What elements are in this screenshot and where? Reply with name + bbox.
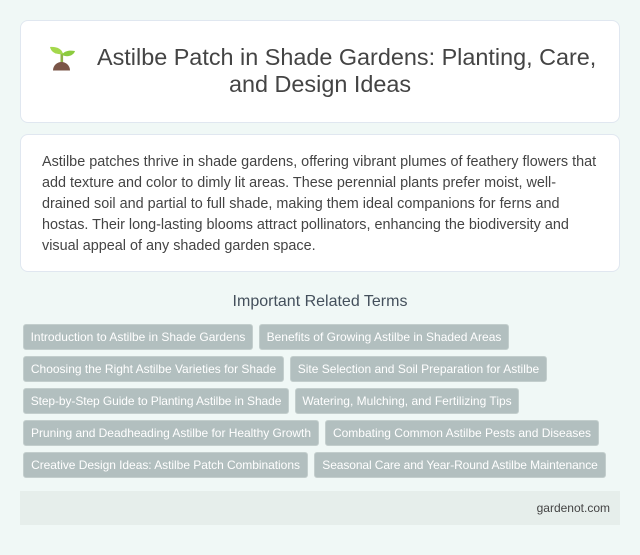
- tag: [23, 356, 284, 382]
- summary text: drained soil and partial to full shade, making them ideal companions for ferns and: [42, 196, 560, 212]
- tag: Choosing the Right Astilbe Varieties for Shade: [31, 362, 276, 376]
- tag: Watering, Mulching, and Fertilizing Tips: [302, 394, 512, 408]
- tag: [295, 388, 519, 414]
- panel: title card: and Design Ideas: [229, 71, 411, 97]
- tag: Site Selection and Soil Preparation for Astilbe: [298, 362, 539, 376]
- tag: Pruning and Deadheading Astilbe for Healthy Growth: [31, 426, 311, 440]
- tag: [259, 324, 509, 350]
- title: [97, 44, 596, 97]
- tag: Creative Design Ideas: Astilbe Patch Combinations: [31, 458, 300, 472]
- heading: related terms: Important Related Terms: [233, 293, 407, 310]
- panel: title card: Astilbe Patch in Shade Gardens: Planting, Care,: [97, 44, 596, 70]
- tag: Step-by-Step Guide to Planting Astilbe in Shade: [31, 394, 281, 408]
- summary text: hostas. Their long-lasting blooms attract pollinators, enhancing the biodiversity and: [42, 217, 569, 233]
- tag: [314, 452, 606, 478]
- tag: [325, 420, 599, 446]
- summary text: add texture and color to dimly lit areas. These perennial plants prefer moist, well-: [42, 175, 556, 191]
- summary text: Astilbe patches thrive in shade gardens, offering vibrant plumes of feathery flowers that: [42, 154, 596, 170]
- tag: Seasonal Care and Year-Round Astilbe Maintenance: [322, 458, 598, 472]
- tag: [23, 420, 319, 446]
- footer bar: [20, 491, 620, 525]
- tag: [23, 452, 308, 478]
- panel: summary card: [20, 134, 620, 272]
- summary text: [42, 154, 596, 254]
- tag: [290, 356, 547, 382]
- tag list: [23, 324, 606, 478]
- summary text: visual appeal of any shaded garden space.: [42, 238, 316, 254]
- tag: [23, 388, 289, 414]
- tag: Benefits of Growing Astilbe in Shaded Areas: [267, 330, 501, 344]
- tag: Introduction to Astilbe in Shade Gardens: [31, 330, 245, 344]
- footer source: gardenot.com: [537, 501, 610, 515]
- panel: title card: [20, 20, 620, 123]
- icon: seedling: [50, 46, 75, 70]
- tag: [23, 324, 253, 350]
- tag: Combating Common Astilbe Pests and Diseases: [333, 426, 591, 440]
